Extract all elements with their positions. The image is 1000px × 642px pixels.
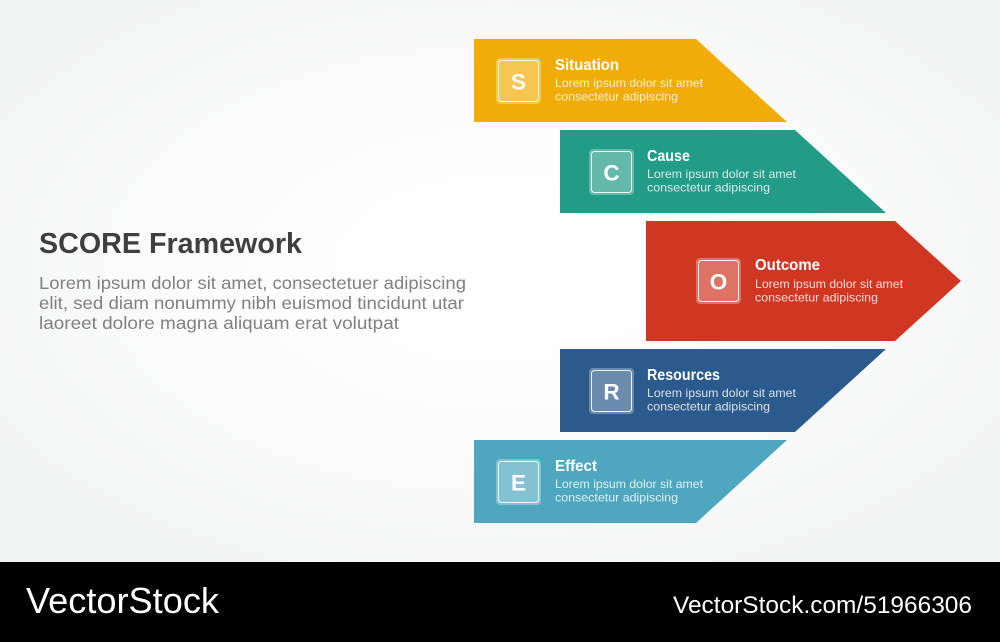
text: Cause description: consectetur adipiscing: [647, 180, 770, 194]
footer url: VectorStock.com/51966306: [673, 592, 972, 619]
label: Effect: Effect: [555, 458, 598, 475]
text: Effect description: Lorem ipsum dolor sit amet: [555, 477, 704, 491]
panel: Cause: [560, 130, 886, 213]
description text block: [39, 273, 466, 333]
text: Cause description: [647, 167, 797, 194]
label: Resources: Resources: [647, 367, 720, 384]
icon: letter R: [589, 368, 634, 414]
text: Outcome description: Lorem ipsum dolor sit amet: [755, 277, 904, 291]
text: Situation description: [555, 76, 704, 104]
text: Resources description: [647, 386, 797, 414]
footer bar: [0, 562, 1000, 642]
icon: letter O: [696, 258, 741, 304]
text: Cause description: Lorem ipsum dolor sit amet: [647, 167, 797, 181]
icon: letter R: R: [603, 380, 620, 404]
icon: letter E: [496, 459, 541, 505]
label: Cause: Cause: [647, 148, 690, 165]
panel: Outcome: [646, 221, 961, 341]
icon: letter E: E: [511, 470, 526, 496]
text: Resources description: Lorem ipsum dolor sit amet: [647, 386, 797, 400]
panel: Resources: [560, 349, 886, 432]
icon: letter C: C: [603, 160, 620, 186]
text: Resources description: consectetur adipiscing: [647, 400, 770, 414]
description text block: Lorem ipsum dolor sit amet, consectetuer adipiscing: [39, 273, 466, 293]
icon: letter C: [589, 149, 634, 195]
title: SCORE Framework: [39, 228, 303, 260]
text: Effect description: consectetur adipiscing: [555, 490, 678, 504]
text: Situation description: Lorem ipsum dolor sit amet: [555, 76, 704, 90]
icon: letter S: S: [511, 70, 526, 94]
icon: letter S: [496, 58, 541, 104]
panel: Effect: [474, 440, 787, 523]
panel: Situation: [474, 39, 787, 122]
label: Outcome: Outcome: [755, 257, 820, 274]
text: Outcome description: consectetur adipiscing: [755, 290, 878, 304]
footer logo: VectorStock: [26, 580, 220, 621]
description text block: elit, sed diam nonummy nibh euismod tincidunt utar: [39, 293, 464, 313]
icon: letter O: O: [710, 270, 727, 294]
text: Situation description: consectetur adipiscing: [555, 90, 678, 104]
description text block: laoreet dolore magna aliquam erat volutpat: [39, 313, 399, 333]
text: Effect description: [555, 477, 704, 504]
text: Outcome description: [755, 277, 904, 304]
label: Situation: Situation: [555, 57, 619, 74]
